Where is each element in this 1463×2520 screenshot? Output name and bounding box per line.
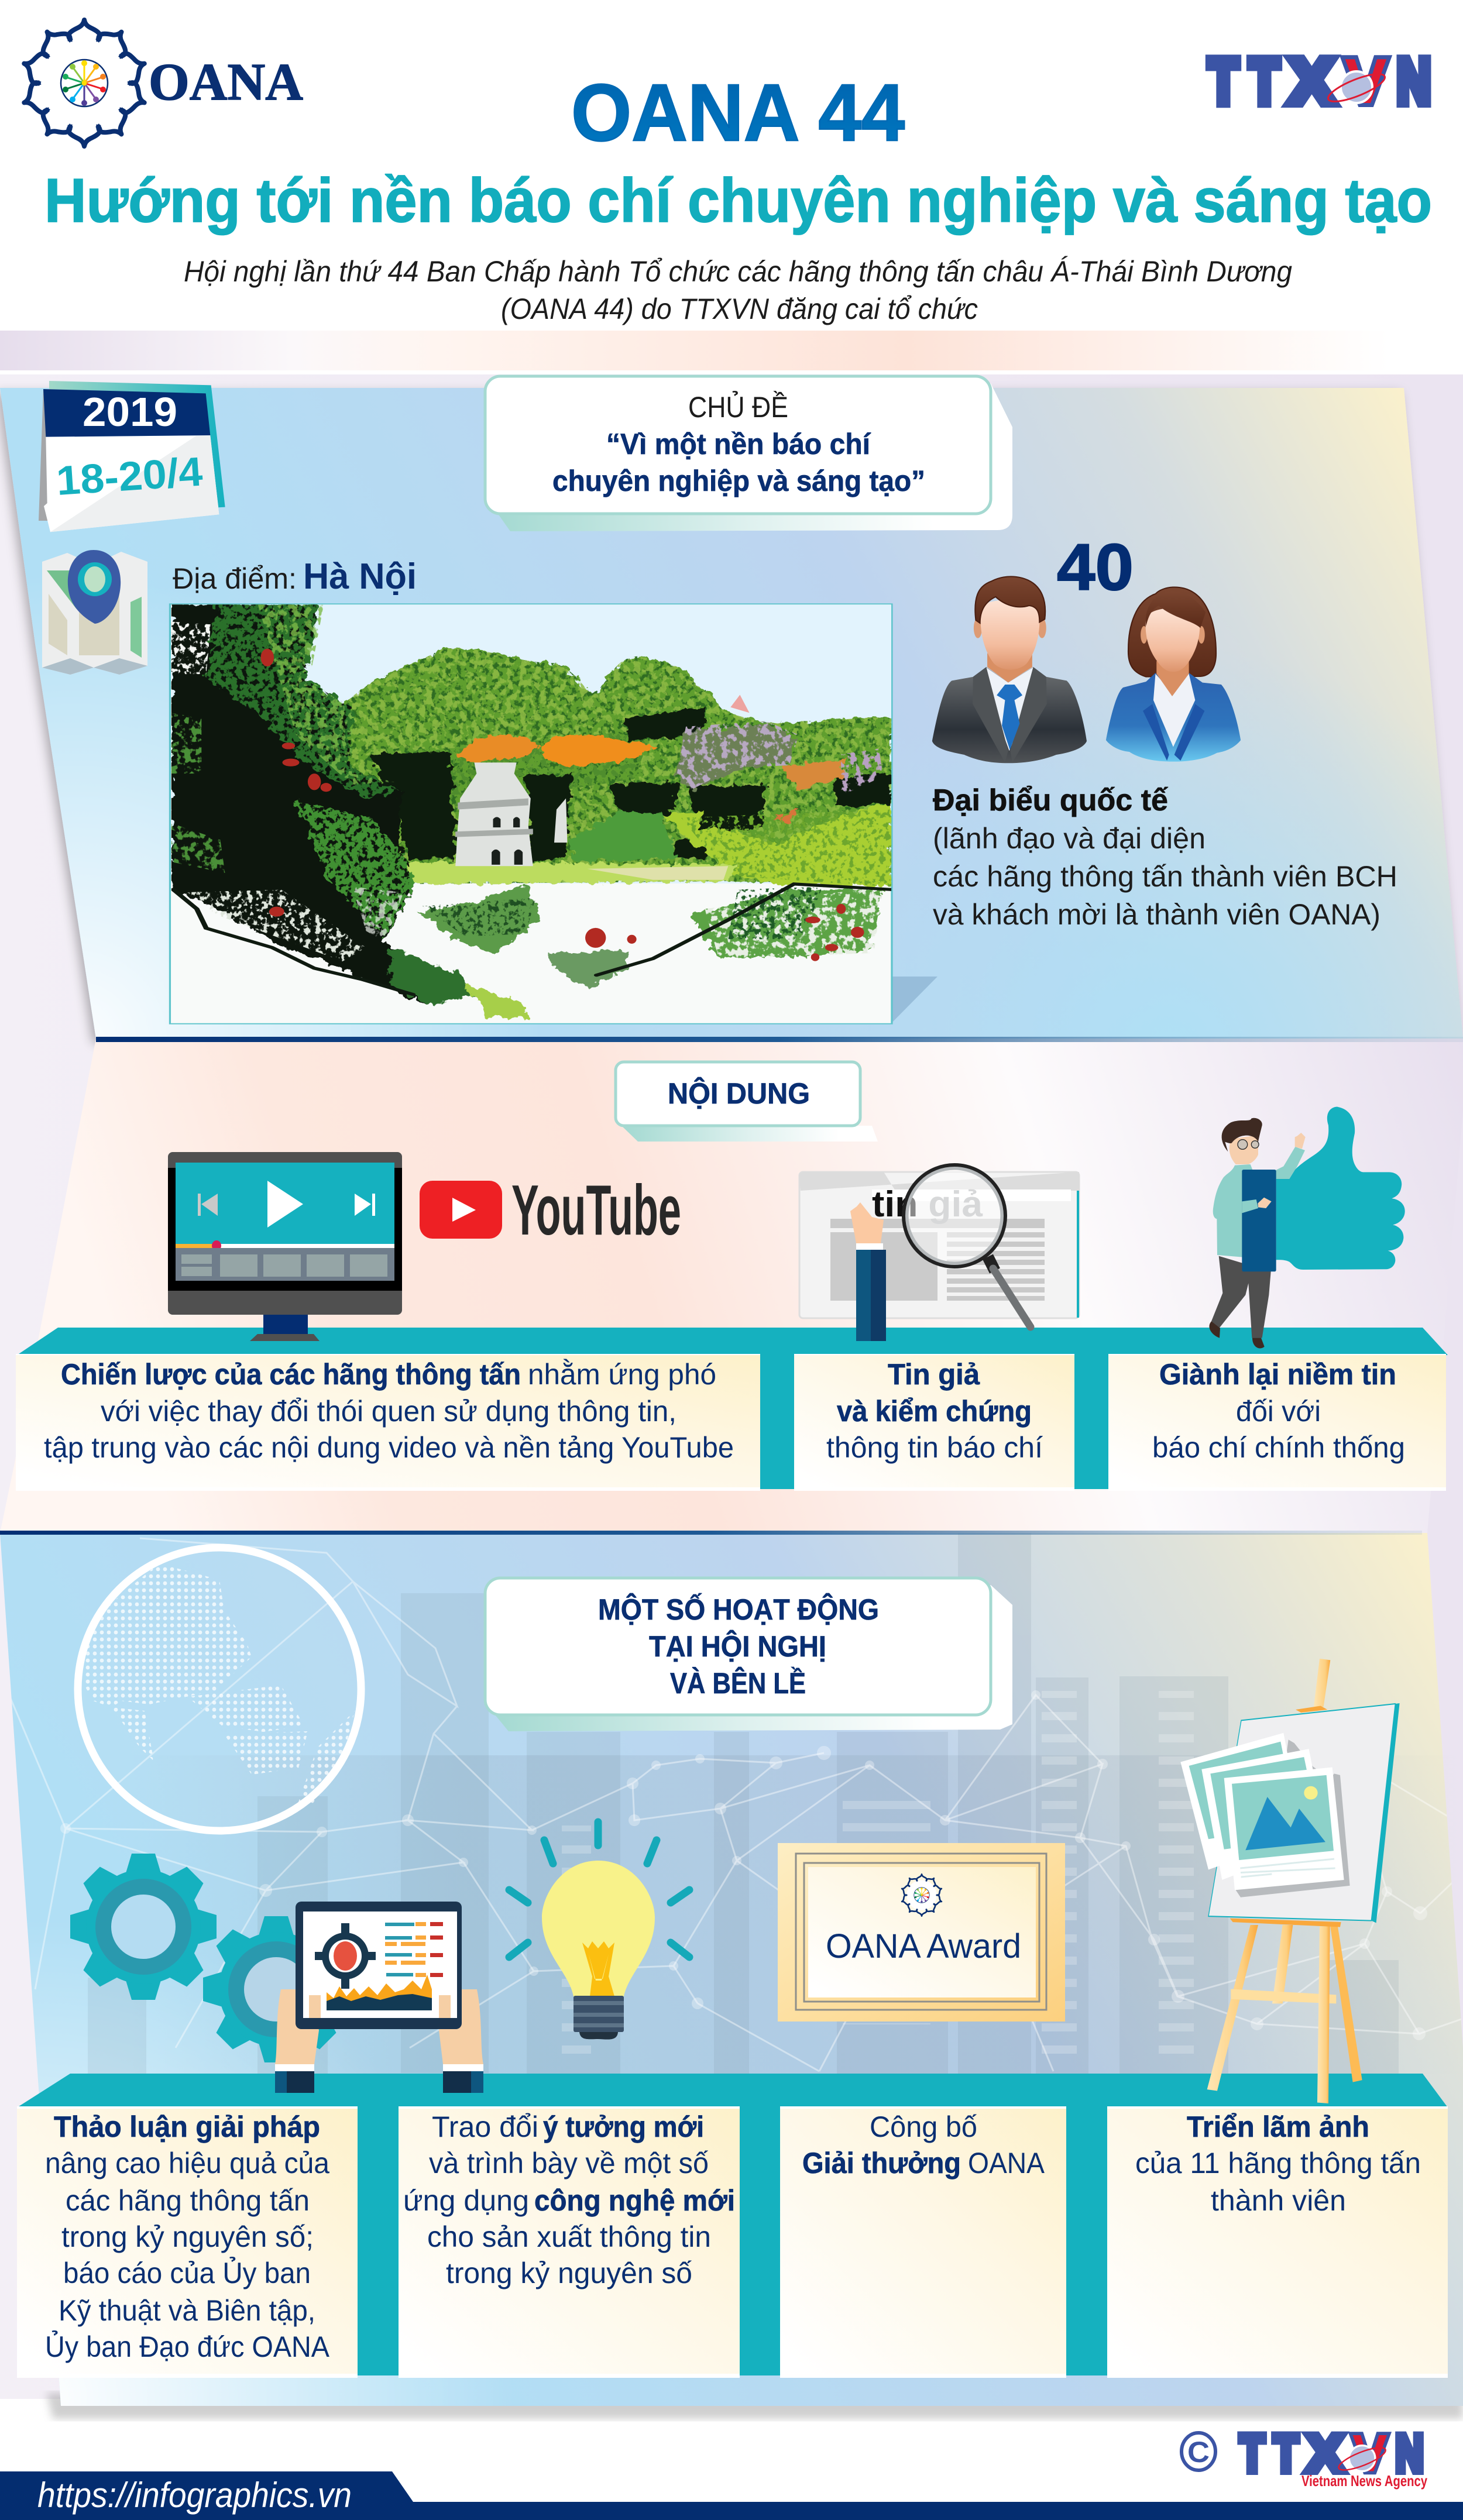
section tag: content: NỘI DUNG: [668, 1077, 810, 1110]
panel: activities: [0, 1519, 1463, 2419]
footer copyright logo: V: [1352, 2424, 1388, 2483]
footer copyright logo: N: [1396, 2424, 1423, 2483]
theme box: “Vì một nền báo chí: [606, 428, 871, 460]
icon: desk calendar: 18-20/4: [55, 449, 204, 504]
theme box: chuyên nghiệp và sáng tạo”: [552, 465, 925, 497]
card: discussing solutions: nâng cao hiệu quả của: [45, 2147, 329, 2179]
card: regaining trust: [1108, 1354, 1446, 1491]
card: exchanging ideas: công nghệ mới: [534, 2184, 735, 2217]
delegates description: [933, 783, 1397, 931]
icon: desk calendar: 2019: [83, 389, 177, 435]
card: discussing solutions: các hãng thông tấn: [66, 2184, 310, 2217]
card: photo exhibition: Triển lãm ảnh: [1187, 2110, 1369, 2143]
icon: male delegate: [932, 576, 1087, 763]
flame trees: [455, 735, 846, 823]
description: (OANA 44) do TTXVN đăng cai tổ chức: [501, 293, 978, 325]
icon: thumbs up with man: [1209, 1107, 1405, 1348]
card: exchanging ideas: [399, 2106, 740, 2378]
TTXVN logo: N: [1397, 46, 1431, 117]
panel 1 background: [0, 388, 1463, 1039]
footer copyright logo: [1182, 2424, 1427, 2490]
dark recesses behind the tower: [371, 707, 891, 862]
footer copyright logo: T: [1273, 2424, 1299, 2483]
icon: OANA Award plaque: OANA Award: [826, 1927, 1021, 1965]
header section: [0, 20, 1463, 370]
icon: globe: [78, 1548, 361, 1831]
icon: fake news browser and magnifier: tin giả: [872, 1184, 983, 1225]
left foreground tree: [171, 604, 465, 1006]
location label: Địa điểm:: [173, 562, 297, 595]
card: award announcement: Giải thưởng: [802, 2147, 961, 2179]
card: video strategy: [16, 1354, 760, 1491]
icon: YouTube logo: YouTube: [511, 1170, 681, 1250]
panel 3 background: [0, 1533, 1463, 2406]
icon: easel with photos: [1180, 1659, 1400, 2103]
section tag: activities: VÀ BÊN LỀ: [670, 1667, 806, 1700]
network lines: [0, 1538, 1463, 2071]
bright foliage: [406, 804, 891, 887]
location label: [173, 556, 417, 597]
footer copyright logo: Vietnam News Agency: [1301, 2472, 1427, 2490]
icon: gear right: [203, 1916, 349, 2062]
card: fake news: và kiểm chứng: [837, 1395, 1032, 1428]
card: photo exhibition: của 11 hãng thông tấn: [1135, 2147, 1421, 2179]
location label: Hà Nội: [303, 556, 417, 597]
card: exchanging ideas: cho sản xuất thông tin: [427, 2220, 711, 2253]
bottom shadow of panel 3: [47, 2393, 1463, 2419]
title: OANA 44: OANA 44: [571, 68, 905, 158]
card: video strategy: với việc thay đổi thói quen sử dụng thông tin,: [101, 1395, 676, 1428]
TTXVN logo: V: [1345, 46, 1387, 117]
delegates description: và khách mời là thành viên OANA): [933, 898, 1380, 931]
card: discussing solutions: [17, 2106, 358, 2378]
card: regaining trust: đối với: [1236, 1395, 1321, 1428]
skyline backdrop: [88, 1519, 1399, 2077]
icon: gear left: [70, 1854, 217, 2000]
TTXVN logo: T: [1249, 46, 1279, 117]
OANA logo: OANA: [149, 53, 303, 111]
divider line under panel 1: [96, 1037, 1463, 1042]
shelf: content cards: [16, 1328, 1448, 1491]
card: award announcement: Công bố: [870, 2110, 977, 2143]
footer copyright logo: X: [1307, 2424, 1344, 2483]
footer: [0, 2424, 1463, 2520]
icon: YouTube logo: [420, 1170, 681, 1250]
card: photo exhibition: [1107, 2106, 1448, 2378]
section tag: activities: MỘT SỐ HOẠT ĐỘNG: [598, 1593, 879, 1626]
card: regaining trust: báo chí chính thống: [1152, 1431, 1405, 1464]
icon: fake news browser and magnifier: [799, 1165, 1079, 1341]
shelf: activity cards: [17, 2074, 1448, 2378]
gradient ribbon: [0, 331, 1463, 370]
section tag: activities: TẠI HỘI NGHỊ: [649, 1629, 826, 1663]
delegates description: (lãnh đạo và đại diện: [933, 822, 1206, 855]
card: exchanging ideas: và trình bày về một số: [429, 2147, 709, 2179]
panel: event overview: [0, 376, 1463, 1039]
icon: desk calendar: [39, 381, 225, 532]
card: fake news: Tin giả: [888, 1358, 980, 1391]
OANA logo: [19, 20, 303, 146]
theme box: [485, 376, 1012, 531]
card: award announcement: OANA: [968, 2147, 1045, 2179]
card: regaining trust: Giành lại niềm tin: [1159, 1358, 1396, 1391]
panel 2 background: [0, 1039, 1463, 1533]
panel: content: [0, 1037, 1463, 1533]
divider line above panel 3: [0, 1531, 1422, 1535]
hanging foliage: [390, 884, 884, 1019]
delegates count: 40: [1057, 531, 1134, 604]
card: exchanging ideas: trong kỷ nguyên số: [446, 2257, 692, 2289]
icon: map pin: [42, 550, 147, 675]
Turtle Tower: [455, 762, 567, 866]
mid-ground trees: [342, 648, 891, 884]
footer bar with url: https://infographics.vn: [37, 2476, 352, 2515]
card: discussing solutions: Kỹ thuật và Biên tập,: [59, 2294, 315, 2327]
delegates description: Đại biểu quốc tế: [933, 783, 1168, 817]
card: fake news: [794, 1354, 1074, 1491]
description: Hội nghị lần thứ 44 Ban Chấp hành Tổ chức các hãng thông tấn châu Á-Thái Bình Dương: [184, 255, 1292, 288]
card: exchanging ideas: ứng dụng: [403, 2184, 529, 2217]
purple blossom: [676, 721, 884, 796]
icon: OANA Award plaque: [778, 1843, 1065, 2021]
icon: female delegate: [1106, 587, 1241, 762]
branches and red flowers: [173, 884, 891, 995]
TTXVN logo: [1208, 46, 1431, 117]
TTXVN logo: X: [1289, 46, 1334, 117]
delegates description: các hãng thông tấn thành viên BCH: [933, 860, 1397, 893]
card: video strategy: nhằm ứng phó: [528, 1358, 716, 1391]
card: discussing solutions: báo cáo của Ủy ban: [63, 2256, 311, 2289]
section tag: content: [616, 1062, 878, 1142]
icon: tablet held in hands: [275, 1902, 483, 2071]
card: photo exhibition: thành viên: [1211, 2184, 1346, 2217]
card: award announcement: [780, 2106, 1066, 2378]
section tag: activities: [485, 1578, 1012, 1731]
icon: light bulb: [509, 1822, 689, 2040]
footer bar with url: [0, 2471, 1463, 2520]
icon: video monitor: [168, 1152, 402, 1341]
TTXVN logo: T: [1208, 46, 1238, 117]
card: exchanging ideas: Trao đổi: [432, 2110, 538, 2143]
description: [184, 255, 1292, 325]
photo fold shadow: [891, 977, 937, 1024]
card: discussing solutions: Ủy ban Đạo đức OANA: [45, 2330, 330, 2363]
theme box: CHỦ ĐỀ: [688, 390, 788, 424]
card: discussing solutions: Thảo luận giải pháp: [54, 2110, 320, 2143]
card: video strategy: tập trung vào các nội dung video và nền tảng YouTube: [44, 1431, 734, 1464]
footer copyright logo: T: [1240, 2424, 1265, 2483]
sleeves on the shelf: [275, 2071, 483, 2093]
photo: Hoan Kiem lake and Turtle Tower: [170, 604, 892, 1024]
card: video strategy: Chiến lược của các hãng thông tấn: [61, 1358, 521, 1391]
card: fake news: thông tin báo chí: [826, 1431, 1043, 1464]
footer copyright logo: C: [1187, 2436, 1210, 2469]
card: discussing solutions: trong kỷ nguyên số;: [61, 2220, 314, 2253]
card: exchanging ideas: ý tưởng mới: [543, 2110, 704, 2143]
